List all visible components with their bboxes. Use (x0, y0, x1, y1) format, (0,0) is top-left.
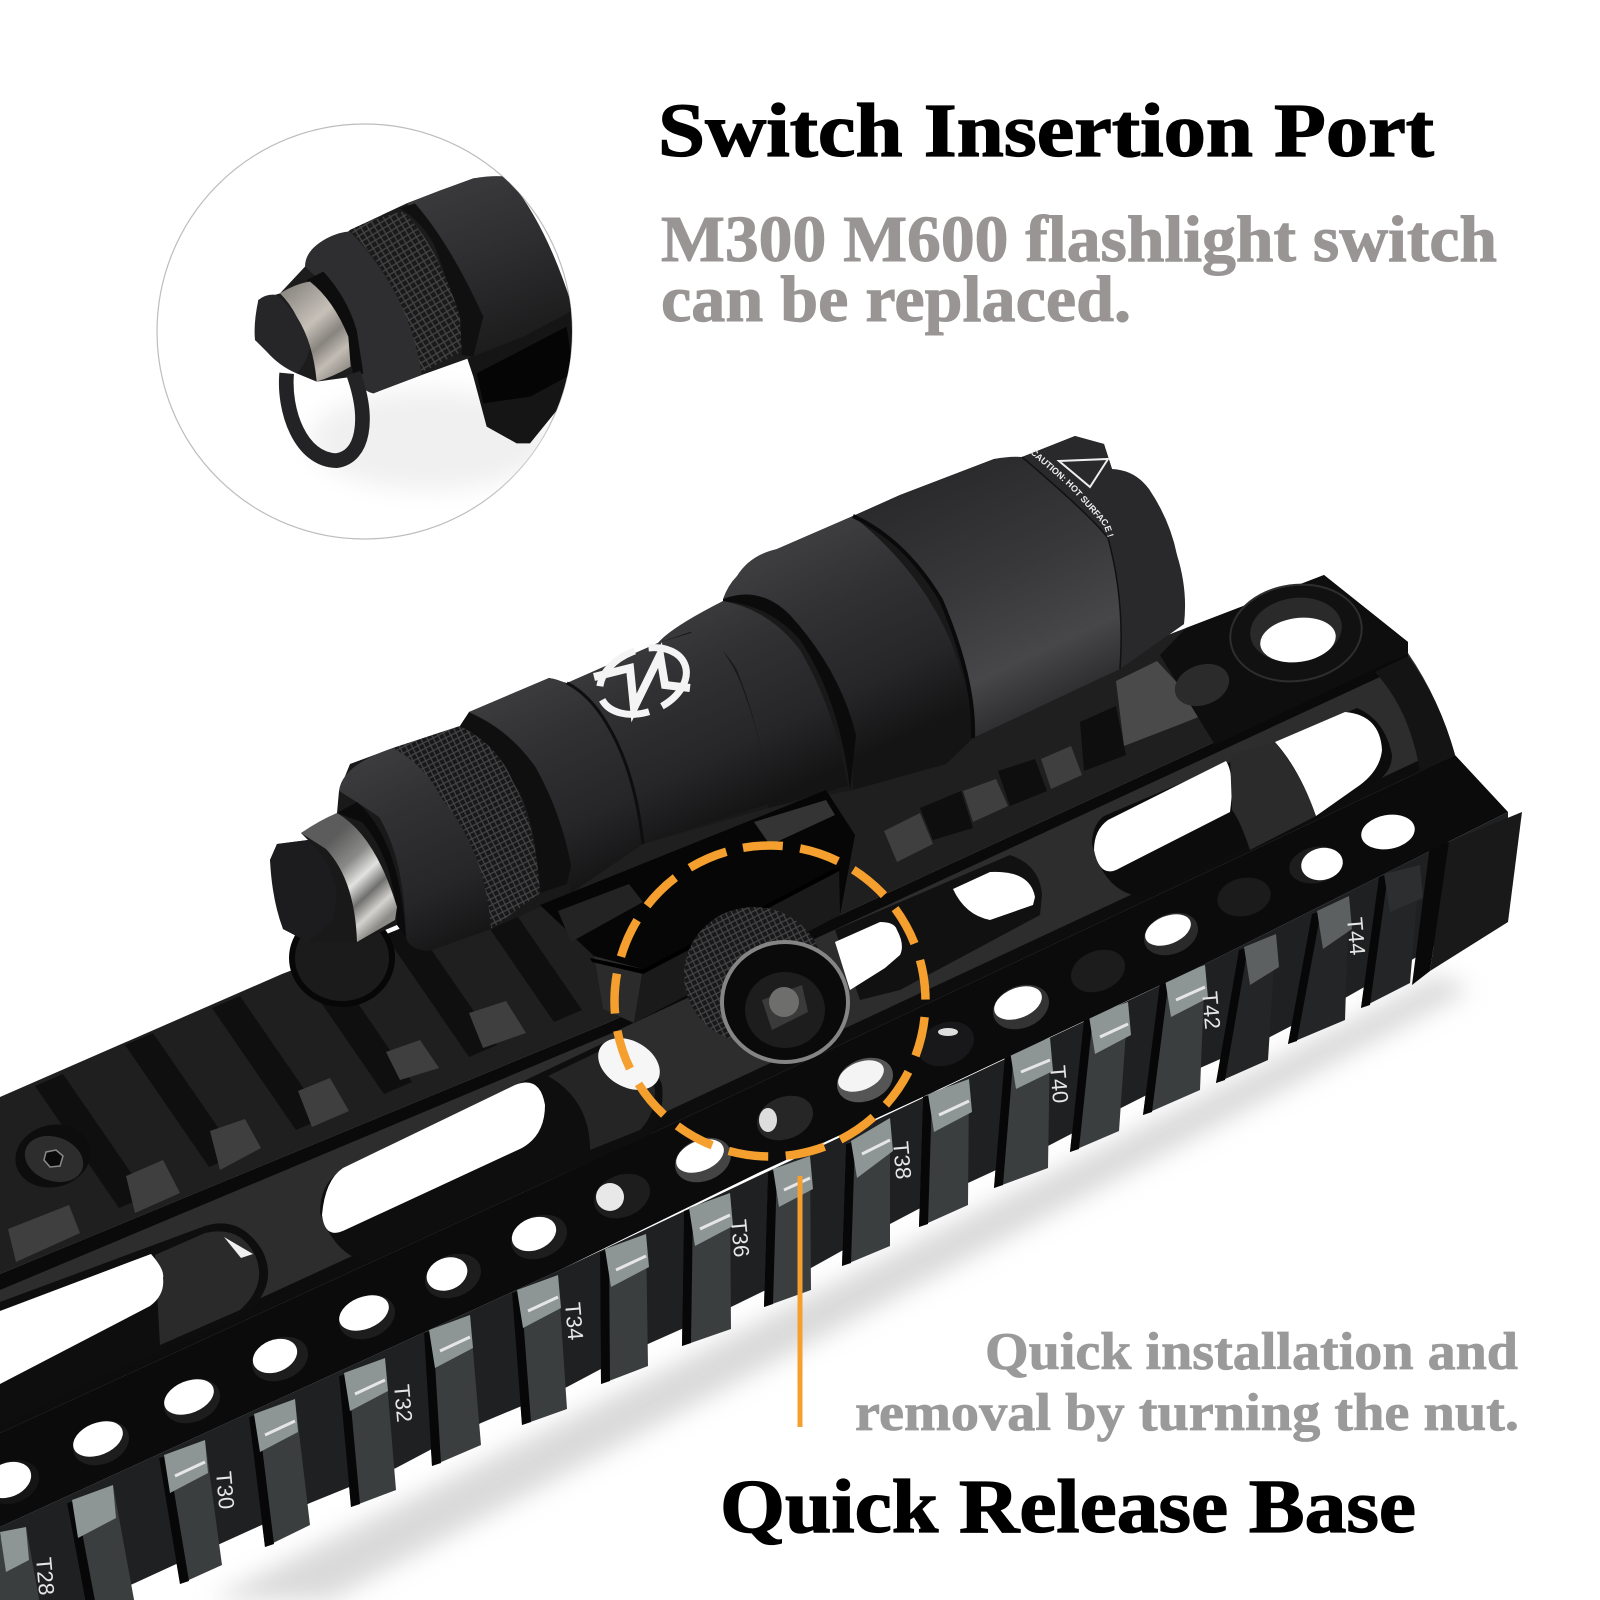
heading: Switch Insertion Port: Switch Insertion Port (658, 89, 1434, 173)
knurled nut (684, 907, 848, 1062)
main product: handguard rail (0, 436, 1522, 1600)
rail number markings: T34 (560, 1301, 588, 1341)
brand logo (590, 635, 696, 727)
orange leader line (798, 1176, 802, 1427)
quick release base (540, 790, 855, 1062)
rail number markings: T44 (1342, 916, 1370, 956)
slot near knob (835, 855, 1042, 1000)
orange dashed highlight circle (590, 821, 950, 1181)
description: quick installation: removal by turning the nut. (855, 1384, 1519, 1442)
rail number markings: T40 (1045, 1064, 1073, 1104)
description: quick installation: Quick installation and (985, 1323, 1518, 1381)
slot right (1092, 708, 1392, 897)
rail number markings: T32 (389, 1383, 417, 1423)
rail number markings: T42 (1197, 990, 1225, 1030)
rail number markings: T30 (211, 1470, 239, 1510)
picatinny rail teeth (0, 812, 1522, 1600)
slot A (0, 1223, 268, 1425)
lower band with round holes (0, 755, 1508, 1527)
slot B (320, 1040, 662, 1262)
description: M300 M600 switch: M300 M600 flashlight switch (661, 203, 1497, 276)
top rail (0, 575, 1408, 1274)
lanyard loop (292, 912, 392, 1004)
rail number markings: T38 (888, 1140, 916, 1180)
mounting screw (8, 1116, 98, 1196)
rail number markings: T28 (31, 1556, 59, 1596)
middle band with oblong slots (0, 653, 1455, 1433)
description: quick installation (855, 1323, 1519, 1442)
description: M300 M600 switch: can be replaced. (661, 263, 1131, 336)
rail number markings: T36 (726, 1218, 754, 1258)
rail number markings (31, 916, 1370, 1596)
heading: Quick Release Base: Quick Release Base (720, 1465, 1416, 1549)
inset circle: switch close-up (157, 124, 573, 539)
flashlight body (270, 436, 1186, 951)
right end plate with ring (1160, 575, 1408, 745)
head warning marking: CAUTION: HOT SURFACE ! (1031, 450, 1114, 537)
description: M300 M600 switch (661, 203, 1497, 336)
